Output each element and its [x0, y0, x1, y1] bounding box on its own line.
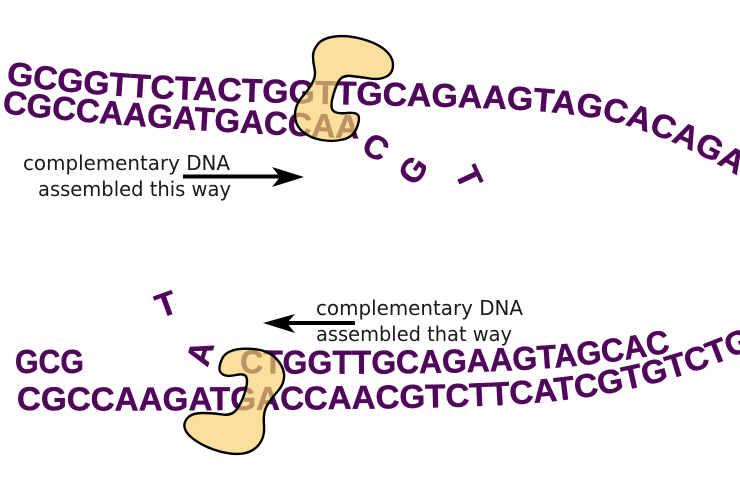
arrow: right: [183, 167, 304, 187]
label: top direction: [23, 151, 231, 201]
label: top direction: assembled this way: [38, 177, 231, 201]
enzyme: top overlay: [295, 36, 393, 141]
label: bottom direction: complementary DNA: [316, 296, 523, 320]
top DNA strand, lower: CGCCAAGATGACCAA: [4, 91, 358, 139]
label: bottom direction: assembled that way: [316, 322, 512, 346]
bottom DNA strand, lower: CGCCAAGATGACCAACGTCTTCATCGTGTCTG: [18, 330, 740, 411]
enzyme: bottom fill: [184, 349, 284, 454]
free nucleotide T: T: [448, 160, 490, 194]
free nucleotide A, bottom: A: [179, 336, 221, 370]
label: top direction: complementary DNA: [23, 151, 230, 175]
enzyme: bottom overlay: [184, 349, 284, 454]
bottom DNA strand, upper: CTGGTTGCAGAAGTAGCAC: [241, 330, 669, 374]
top DNA strand, upper: GCGGTTCTACTGGTTGCAGAAGTAGCACAGA: [8, 62, 740, 176]
free nucleotide T, bottom: T: [150, 283, 182, 325]
enzyme: top fill: [295, 36, 393, 141]
free nucleotide G: G: [390, 149, 436, 191]
free nucleotide C: C: [356, 125, 396, 169]
arrow: left: [263, 314, 355, 333]
bottom DNA strand fragment: GCG: [15, 343, 84, 380]
label: bottom direction: [316, 296, 523, 346]
